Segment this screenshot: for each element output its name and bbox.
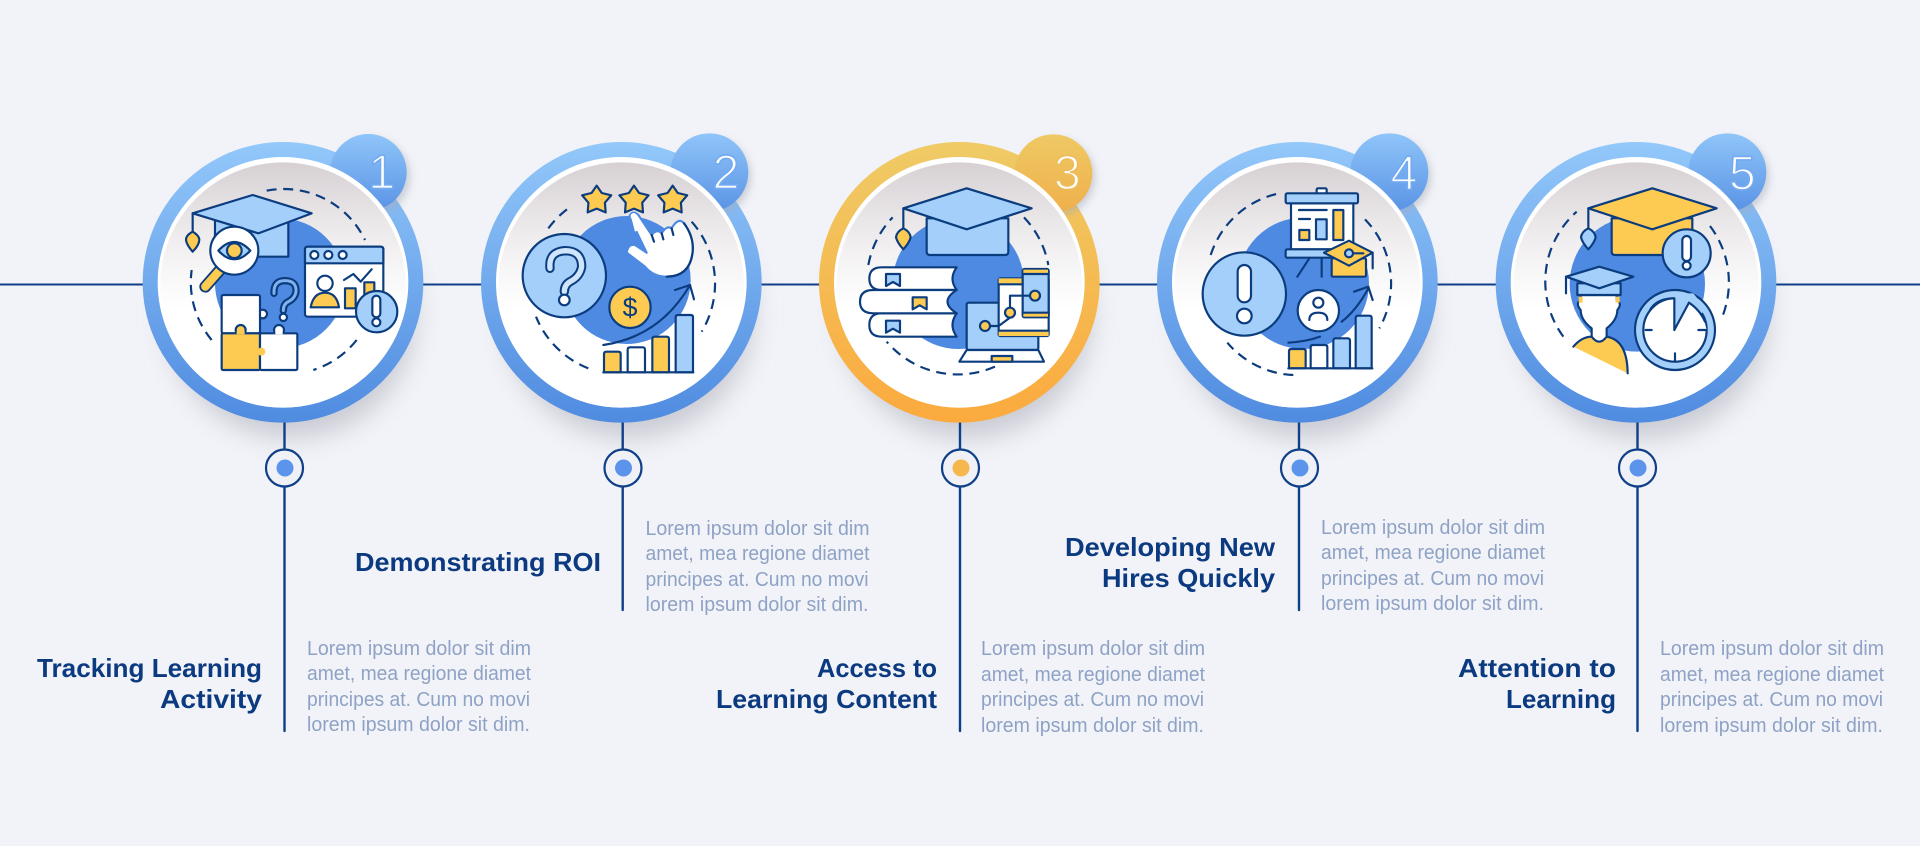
heading 4: Hires Quickly bbox=[1102, 563, 1276, 593]
shadows under circles bbox=[167, 190, 1768, 438]
heading 2: Demonstrating ROI bbox=[355, 547, 601, 577]
icon: stars, hand, coin, bars bbox=[523, 186, 715, 372]
body text 4: Lorem ipsum dolor sit dim bbox=[1321, 517, 1545, 539]
heading 1: Activity bbox=[160, 684, 263, 714]
circle badge and icon 5 bbox=[1496, 133, 1776, 423]
heading 3: Access to bbox=[817, 653, 937, 683]
number 3: 3 bbox=[1054, 147, 1081, 200]
body text 2: amet, mea regione diamet bbox=[646, 543, 870, 565]
body text 3: Lorem ipsum dolor sit dim bbox=[981, 638, 1205, 660]
connector and node 1 bbox=[266, 420, 303, 731]
body text 5: principes at. Cum no movi bbox=[1660, 689, 1883, 711]
body text 5 bbox=[1660, 638, 1884, 737]
body text 2: principes at. Cum no movi bbox=[646, 569, 868, 591]
body text 5: Lorem ipsum dolor sit dim bbox=[1660, 638, 1884, 660]
body text 5: amet, mea regione diamet bbox=[1660, 664, 1884, 686]
heading 4 bbox=[1065, 532, 1276, 593]
body text 1: Lorem ipsum dolor sit dim bbox=[307, 638, 531, 660]
body text 3 bbox=[981, 638, 1205, 737]
panel: step 5 attention to learning bbox=[1458, 133, 1884, 737]
circle badge and icon 1 bbox=[143, 134, 423, 423]
heading 5: Learning bbox=[1506, 684, 1616, 714]
number 4: 4 bbox=[1391, 148, 1417, 201]
connector and node 3 bbox=[942, 420, 979, 731]
panel: step 3 access to learning content bbox=[716, 134, 1205, 737]
number 2: 2 bbox=[713, 146, 739, 199]
heading 1: Tracking Learning bbox=[37, 653, 262, 683]
heading 1 bbox=[37, 653, 263, 714]
body text 1: lorem ipsum dolor sit dim. bbox=[307, 714, 530, 736]
circle badge and icon 3 bbox=[819, 134, 1100, 423]
circle badge and icon 2 bbox=[481, 133, 762, 423]
number 1: 1 bbox=[368, 146, 395, 199]
body text 3: amet, mea regione diamet bbox=[981, 664, 1205, 686]
heading 3 bbox=[716, 653, 937, 714]
horizontal timeline bbox=[0, 284, 1920, 286]
body text 4: amet, mea regione diamet bbox=[1321, 542, 1545, 564]
number 5: 5 bbox=[1729, 147, 1756, 200]
icon: cap, magnifier, window, puzzle bbox=[186, 189, 397, 370]
body text 4: lorem ipsum dolor sit dim. bbox=[1321, 593, 1544, 615]
body text 3: principes at. Cum no movi bbox=[981, 689, 1204, 711]
body text 2: Lorem ipsum dolor sit dim bbox=[646, 518, 870, 540]
circle badge and icon 4 bbox=[1157, 133, 1438, 423]
icon: cap, books, devices bbox=[860, 188, 1049, 374]
heading 5: Attention to bbox=[1458, 653, 1616, 683]
body text 4 bbox=[1321, 517, 1545, 615]
connector and node 4 bbox=[1281, 420, 1318, 610]
heading 3: Learning Content bbox=[716, 684, 937, 714]
icon: stars, hand, coin, bars: $ bbox=[623, 293, 638, 323]
heading 4: Developing New bbox=[1065, 532, 1276, 562]
body text 1 bbox=[307, 638, 531, 736]
panel: step 2 demonstrating ROI bbox=[355, 133, 870, 616]
body text 2 bbox=[646, 518, 870, 616]
body text 1: amet, mea regione diamet bbox=[307, 663, 531, 685]
connector and node 5 bbox=[1619, 420, 1656, 731]
panel: step 4 developing new hires quickly bbox=[1065, 133, 1545, 615]
body text 2: lorem ipsum dolor sit dim. bbox=[646, 594, 868, 616]
panel: step 1 tracking learning activity bbox=[37, 134, 531, 736]
body text 3: lorem ipsum dolor sit dim. bbox=[981, 715, 1204, 737]
connector and node 2 bbox=[604, 420, 642, 610]
heading 5 bbox=[1458, 653, 1616, 714]
body text 5: lorem ipsum dolor sit dim. bbox=[1660, 715, 1883, 737]
icon: presentation board, alert, person, bars bbox=[1203, 188, 1391, 375]
body text 1: principes at. Cum no movi bbox=[307, 689, 530, 711]
body text 4: principes at. Cum no movi bbox=[1321, 568, 1544, 590]
icon: yellow cap, alert, student, clock bbox=[1545, 188, 1729, 373]
